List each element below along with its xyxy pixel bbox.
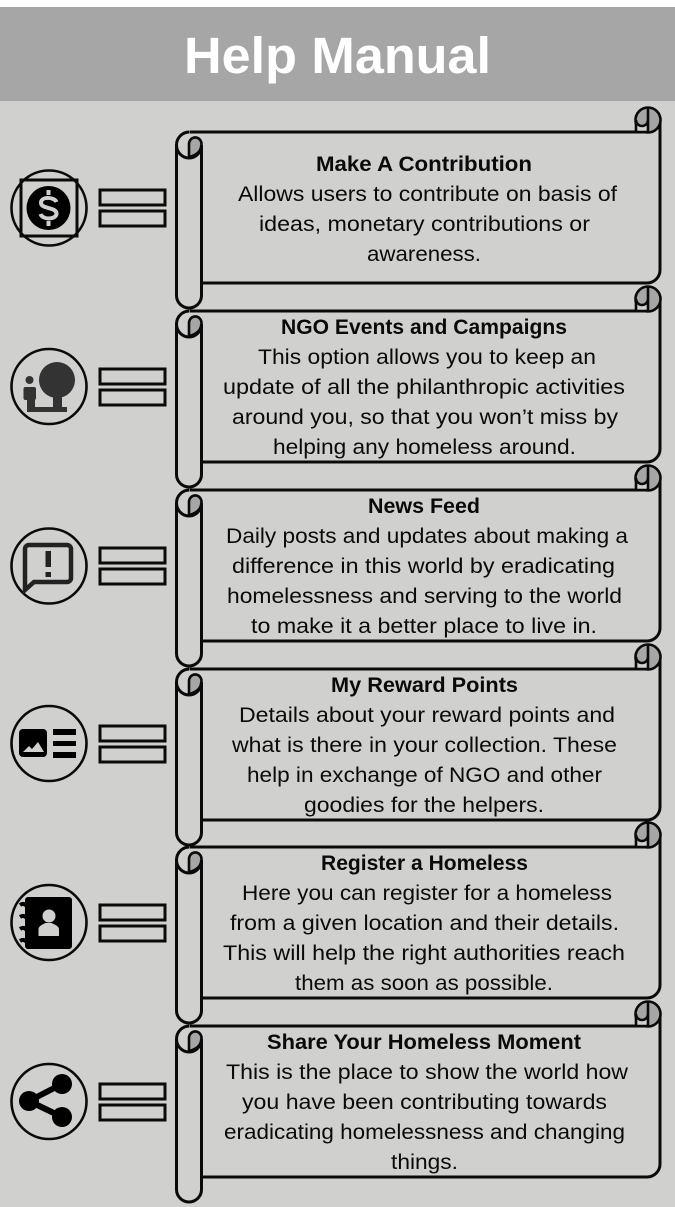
body text xyxy=(223,346,625,459)
body text: update of all the philanthropic activities xyxy=(223,376,625,399)
body text: Here you can register for a homeless xyxy=(242,882,612,905)
panel: NGO Events and Campaigns xyxy=(12,286,660,487)
body text: This option allows you to keep an xyxy=(258,346,596,369)
heading: My Reward Points xyxy=(331,674,518,697)
body text: This is the place to show the world how xyxy=(226,1061,629,1084)
panel: Register a Homeless xyxy=(12,822,660,1023)
body text xyxy=(223,882,625,995)
body text: homelessness and serving to the world xyxy=(227,585,622,608)
icon: dollar coin in circle xyxy=(12,170,86,246)
body text: from a given location and their details. xyxy=(230,912,619,935)
heading: NGO Events and Campaigns xyxy=(281,316,567,339)
connector bars xyxy=(100,190,165,226)
body text: you have been contributing towards xyxy=(242,1091,607,1114)
body text xyxy=(224,1061,629,1174)
body text xyxy=(226,525,628,638)
heading: News Feed xyxy=(368,495,480,518)
icon: speech bubble with exclamation in circle xyxy=(12,528,86,604)
heading: Register a Homeless xyxy=(321,852,528,875)
body text: help in exchange of NGO and other xyxy=(247,764,602,787)
panel: Share Your Homeless Moment xyxy=(12,1002,660,1202)
panel: Make A Contribution xyxy=(12,108,660,308)
connector bars xyxy=(100,905,165,941)
body text: goodies for the helpers. xyxy=(304,794,544,817)
body text: ideas, monetary contributions or xyxy=(259,213,590,236)
body text: Daily posts and updates about making a xyxy=(226,525,628,548)
body text: what is there in your collection. These xyxy=(231,734,617,757)
heading: Make A Contribution xyxy=(316,153,532,176)
connector bars xyxy=(100,548,165,584)
connector bars xyxy=(100,726,165,762)
title: Help Manual xyxy=(184,27,491,84)
panel: News Feed xyxy=(12,466,660,666)
scroll frame xyxy=(176,108,660,308)
body text: eradicating homelessness and changing xyxy=(224,1121,625,1144)
body text: helping any homeless around. xyxy=(273,436,576,459)
body text: This will help the right authorities reach xyxy=(223,942,625,965)
body text: Allows users to contribute on basis of xyxy=(238,183,617,206)
heading: Share Your Homeless Moment xyxy=(267,1031,581,1054)
scroll frame xyxy=(176,822,660,1023)
panel: My Reward Points xyxy=(12,644,660,845)
body text: things. xyxy=(391,1151,458,1174)
body text: Details about your reward points and xyxy=(239,704,615,727)
scroll frame xyxy=(176,644,660,845)
body text: difference in this world by eradicating xyxy=(232,555,615,578)
body text: awareness. xyxy=(367,243,481,266)
connector bars xyxy=(100,1084,165,1120)
scroll frame xyxy=(176,1002,660,1202)
scroll frame xyxy=(176,286,660,487)
body text xyxy=(238,183,617,266)
body text: them as soon as possible. xyxy=(295,972,553,995)
icon: person and tree in circle xyxy=(12,349,86,424)
header banner xyxy=(0,7,675,101)
icon: picture and text lines in circle xyxy=(12,706,86,781)
icon: address book in circle xyxy=(12,885,86,960)
body text: around you, so that you won’t miss by xyxy=(232,406,619,429)
body text: to make it a better place to live in. xyxy=(251,615,597,638)
body text xyxy=(231,704,617,817)
scroll frame xyxy=(176,466,660,666)
connector bars xyxy=(100,369,165,405)
icon: share nodes in circle xyxy=(12,1064,86,1139)
